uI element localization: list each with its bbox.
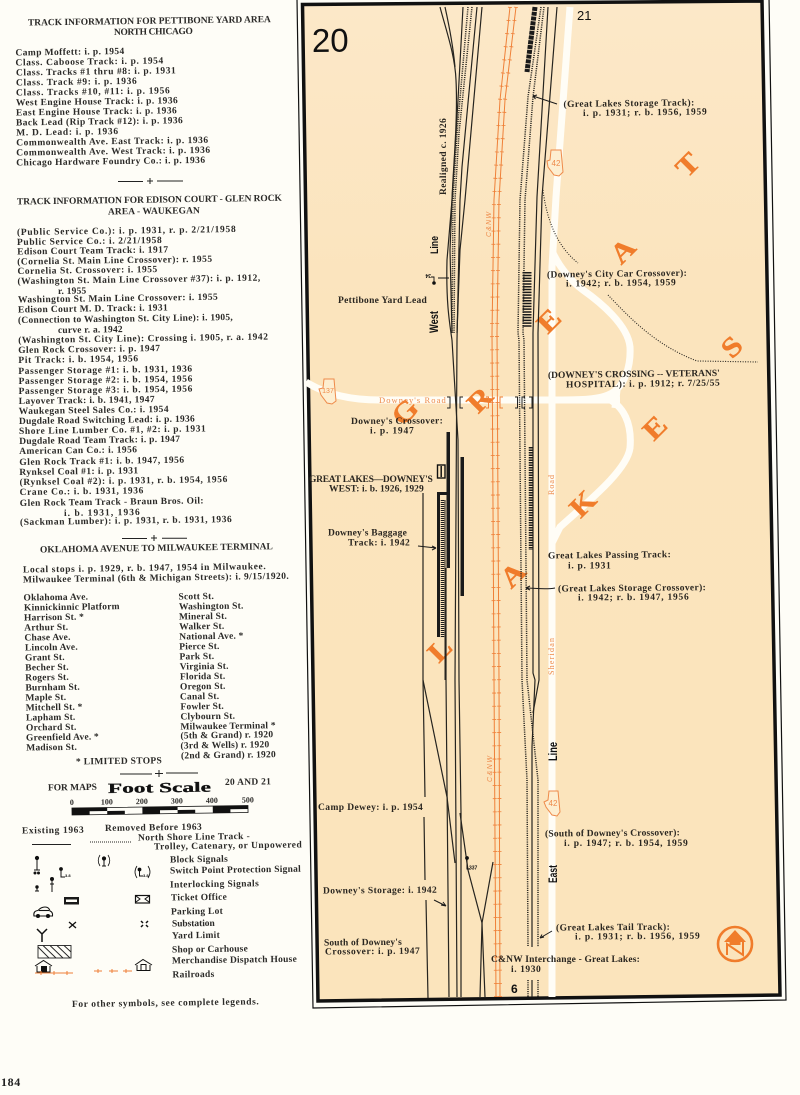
removed dotted city car crossover (543, 190, 758, 362)
text block: Edison Court track list: curve r. a. 1942 (58, 325, 123, 336)
scale bar: 300 (171, 796, 183, 806)
map track labels: i. p. 1947 (370, 426, 414, 436)
text block: stops column one: Kinnickinnic Platform (24, 602, 120, 613)
map track labels (309, 97, 720, 975)
text block: stops column one: Chase Ave. (24, 633, 71, 643)
shield: route 42 south (544, 791, 560, 816)
shield: route 42 north: 42 (552, 159, 561, 168)
text block: Edison Court track list: (Washington St. City Line): Crossing i. 1905, r. a. 1942 (18, 332, 268, 346)
text block: Edison Court track list: Cornelia St. Crossover: i. 1955 (17, 265, 158, 277)
text block: stops column two: Walker St. (179, 622, 224, 632)
panel: legend (22, 823, 303, 1010)
legend column headings: Existing 1963 (22, 826, 84, 836)
panel: Pettibone Yard track information (15, 15, 271, 168)
text block: stops column one (23, 593, 120, 753)
map track labels: i. 1930 (511, 965, 541, 975)
legend labels: Shop or Carhouse (172, 944, 248, 955)
legend column headings (22, 823, 303, 852)
map track labels: (Great Lakes Tail Track): (556, 922, 670, 933)
scale caption (48, 777, 271, 797)
West Line tracks (440, 7, 482, 997)
route shields (319, 150, 563, 816)
orange diagonal lettering: GREAT LAKES: S (714, 329, 749, 364)
icon: merchandise dispatch house and railroads (35, 960, 152, 975)
icon: shop or carhouse hatch (38, 946, 71, 958)
text block: stops column two: Milwaukee Terminal * (180, 721, 276, 732)
map track labels: Downey's Storage: i. 1942 (323, 886, 437, 896)
scale bar: 0 (70, 798, 74, 807)
legend labels: Yard Limit (172, 931, 221, 941)
text block: stops column two: (2nd & Grand) r. 1920 (181, 749, 276, 761)
orange diagonal lettering: GREAT LAKES (385, 146, 749, 669)
map track labels: i. p. 1931 (568, 562, 611, 572)
text block: stops column two: Park St. (179, 652, 214, 662)
map background and frame (297, 0, 786, 1008)
map track labels: (Great Lakes Storage Track): (563, 97, 695, 110)
legend labels: Switch Point Protection Signal (170, 865, 301, 876)
icon: switch point protection signals: 3.8 (65, 873, 71, 878)
text block: stops column two: Washington St. (179, 602, 244, 612)
panel: Edison Court - Glen Rock track information (17, 194, 283, 528)
map track labels: WEST: i. b. 1926, 1929 (329, 484, 424, 494)
text block: Edison Court track list: (Public Service Co.): i. p. 1931, r. p. 2/21/1958 (17, 224, 236, 238)
text block: Edison Court track list: Waukegan Steel Sales Co.: i. 1954 (19, 405, 169, 417)
map track labels: C&NW Interchange - Great Lakes: (491, 955, 640, 965)
street and line labels: Line (429, 236, 441, 254)
legend labels: Block Signals (170, 855, 228, 865)
text block: Edison Court track list: r. 1955 (58, 287, 87, 297)
text block: Pettibone track list: East Engine House Track: i. p. 1936 (16, 106, 177, 118)
text block: Pettibone track list: Class. Tracks #1 thru #8: i. p. 1931 (16, 66, 176, 78)
text block: Edison Court track list: Passenger Storage #1: i. b. 1931, 1936 (18, 365, 192, 377)
text block: Edison Court track list: Dugdale Road Switching Lead: i. p. 1936 (19, 415, 195, 427)
signals on map: 337 (469, 866, 478, 872)
text block: Edison Court track list: Passenger Storage #2: i. b. 1954, 1956 (19, 375, 193, 387)
text block: stops column two: Oregon St. (180, 682, 226, 692)
map track labels: (DOWNEY'S CROSSING -- VETERANS' (548, 368, 720, 381)
text block: Edison Court track list: i. b. 1931, 1936 (64, 508, 140, 519)
text block: Edison Court track list: American Can Co.: i. 1956 (19, 445, 137, 457)
street and line labels: Line (546, 742, 560, 761)
map title numbers: 6 (511, 982, 518, 996)
text block: stops column one: Harrison St. * (24, 613, 84, 623)
text block: local stops note: Local stops i. p. 1929, r. b. 1947, 1954 in Milwaukee. (23, 562, 266, 575)
text block: Pettibone track list: West Engine House Track: i. p. 1936 (16, 96, 178, 108)
text block: stops column one: Lincoln Ave. (25, 643, 78, 653)
icon: switch point protection signals: 3.8 (143, 873, 149, 878)
map track labels: (Great Lakes Storage Crossover): (558, 582, 706, 594)
map track labels: Downey's Crossover: (351, 417, 443, 427)
street and line labels: West (427, 311, 441, 333)
text block: Pettibone track list: Back Lead (Rip Track #12): i. p. 1936 (16, 115, 183, 128)
map title numbers: 20 (312, 22, 349, 59)
text block: stops column two (178, 592, 276, 761)
icon: switch point protection signals (60, 866, 150, 878)
text block: stops column one: Orchard St. (26, 723, 77, 733)
map track labels: i. p. 1931; r. b. 1956, 1959 (583, 107, 707, 119)
map track labels: Camp Dewey: i. p. 1954 (318, 803, 423, 813)
text block: Edison Court track list: Washington St. Main Line Crossover: i. 1955 (18, 293, 218, 305)
map track labels: i. 1942; r. b. 1947, 1956 (578, 593, 689, 603)
street and line labels: Realigned c. 1926 (439, 118, 449, 195)
map track labels: South of Downey's (324, 938, 402, 948)
heading: Pettibone Yard Area (28, 15, 271, 38)
map track labels: GREAT LAKES—DOWNEY'S (309, 475, 433, 485)
text block: Edison Court track list: Glen Rock Team Track - Braun Bros. Oil: (20, 496, 204, 509)
text block: Edison Court track list: Pit Track: i. b. 1954, 1956 (18, 354, 138, 366)
heading: Edison Court - Glen Rock (17, 194, 283, 217)
text block: stops column one: Madison St. (26, 743, 77, 753)
panel: map 20 (297, 0, 786, 1008)
scale bar: 500 (242, 795, 254, 805)
orange diagonal lettering: GREAT LAKES: E (530, 302, 568, 340)
shield: route 137 (319, 379, 336, 404)
map track labels: i. p. 1931; r. b. 1956, 1959 (575, 932, 700, 942)
icon: yard limit (37, 929, 47, 942)
text block: stops column two: Pierce St. (179, 642, 220, 652)
shield: route 42 south: 42 (549, 799, 558, 808)
orange diagonal lettering: GREAT LAKES: T (669, 146, 707, 184)
text block: stops column two: Fowler St. (180, 702, 224, 712)
text block: Edison Court track list: Layover Track: i. b. 1941, 1947 (19, 395, 155, 407)
legend labels: Parking Lot (171, 907, 224, 917)
street and line labels: East (546, 865, 560, 883)
signals on map (425, 272, 478, 872)
scale caption: FOR MAPS (48, 783, 97, 793)
text block: Pettibone track list: Class. Tracks #10, #11: i. p. 1956 (16, 86, 170, 98)
map track labels: Pettibone Yard Lead (338, 296, 428, 306)
icon: interlocking signals (35, 878, 54, 892)
roads (306, 7, 630, 997)
orange diagonal lettering: GREAT LAKES: G (385, 392, 425, 432)
map track labels: Great Lakes Passing Track: (548, 550, 671, 561)
text block: Edison Court track list: Passenger Storage #3: i. b. 1954, 1956 (19, 385, 193, 397)
heading: Edison Court - Glen Rock: AREA - WAUKEGAN (108, 206, 200, 217)
scale caption: 20 AND 21 (225, 777, 271, 788)
text block: stops column two: Virginia St. (180, 662, 229, 672)
map track labels: Downey's Baggage (328, 528, 407, 538)
text block: local stops note: Milwaukee Terminal (6th & Michigan Streets): i. 9/15/1920. (23, 571, 289, 585)
legend labels: Interlocking Signals (170, 879, 259, 890)
icon: ticket office (64, 896, 150, 904)
text block: Pettibone track list: Class. Caboose Track: i. p. 1954 (15, 56, 164, 68)
text block: stops column two: Canal St. (180, 692, 219, 702)
text block: Edison Court track list (17, 224, 268, 528)
text block: Edison Court track list: (Washington St. Main Line Crossover #37): i. p. 1912, (17, 273, 261, 287)
text block: stops column one: Arthur St. (24, 623, 68, 633)
East Line tracks (518, 7, 557, 997)
shield: route 42 north (547, 150, 563, 176)
Downey's storage and yard tracks (423, 432, 493, 998)
street and line labels: C&NW (487, 755, 494, 782)
text block: Pettibone track list: Commonwealth Ave. East Track: i. p. 1936 (16, 136, 208, 148)
text block: stops column one: Lapham St. (26, 713, 76, 723)
heading: Pettibone Yard Area: NORTH CHICAGO (114, 27, 193, 38)
text block: stops column two: National Ave. * (179, 632, 244, 642)
orange diagonal lettering: GREAT LAKES: K (563, 483, 603, 524)
text block: Edison Court track list: Glen Rock Track #1: i. b. 1947, 1956 (19, 456, 184, 468)
text block: stops column one: Grant St. (25, 653, 65, 663)
text block: stops column two: Florida St. (180, 672, 226, 682)
text block: Pettibone track list: Camp Moffett: i. p. 1954 (15, 47, 125, 58)
note: limited stops: * LIMITED STOPS (76, 756, 162, 767)
legend labels: Merchandise Dispatch House (172, 955, 297, 966)
text block: Pettibone track list: Chicago Hardware Foundry Co.: i. p. 1936 (16, 156, 205, 168)
text block: stops column two: Mineral St. (179, 612, 227, 622)
map track labels: Track: i. 1942 (348, 538, 410, 548)
shield: route 137: 137 (322, 388, 334, 395)
text block: Edison Court track list: (Sackman Lumber): i. p. 1931, r. b. 1931, 1936 (20, 514, 232, 528)
text block: Edison Court track list: Dugdale Road Team Track: i. p. 1947 (19, 435, 180, 447)
panel: Oklahoma Avenue to Milwaukee Terminal (23, 542, 289, 767)
orange diagonal lettering: GREAT LAKES: A (493, 555, 532, 594)
text block: stops column two: (5th & Grand) r. 1920 (180, 729, 273, 741)
text block: stops column two: (3rd & Wells) r. 1920 (180, 739, 269, 751)
text block: Edison Court track list: Crane Co.: i. b. 1931, 1936 (20, 486, 144, 498)
text block: stops column one: Maple St. (25, 693, 66, 703)
legend labels: Railroads (172, 970, 215, 980)
orange diagonal lettering: GREAT LAKES: A (603, 231, 642, 270)
map track labels: HOSPITAL): i. p. 1912; r. 7/25/55 (566, 378, 720, 390)
legend column headings: North Shore Line Track - (138, 832, 250, 843)
page number: 184 (1, 1075, 21, 1089)
C&NW railroad orange tracks (492, 7, 516, 997)
street and line labels: Sheridan (547, 638, 556, 675)
panel: foot scale (48, 777, 271, 815)
orange diagonal lettering: GREAT LAKES: L (421, 631, 459, 669)
icon: substation (69, 921, 148, 928)
note: other symbols: For other symbols, see complete legends. (72, 997, 259, 1010)
map track labels: (South of Downey's Crossover): (545, 827, 680, 839)
text block: Edison Court track list: Public Service Co.: i. 2/21/1958 (17, 236, 162, 248)
text block: stops column one: Oklahoma Ave. (23, 593, 88, 603)
map title numbers (312, 8, 591, 996)
text block: Edison Court track list: Shore Line Lumber Co. #1, #2: i. p. 1931 (19, 424, 206, 437)
street and line labels: Downey's Road (379, 395, 446, 405)
scale caption: Foot Scale (108, 781, 211, 797)
text block: Pettibone track list: Commonwealth Ave. West Track: i. p. 1936 (16, 146, 210, 158)
text block: stops column one: Greenfield Ave. * (26, 732, 99, 743)
street and line labels: Road (547, 475, 556, 495)
legend labels (170, 855, 301, 980)
text block: stops column two: Clybourn St. (180, 712, 235, 722)
map track labels: i. p. 1947; r. b. 1954, 1959 (564, 839, 688, 849)
icon: north compass (718, 927, 752, 961)
legend column headings: Removed Before 1963 (105, 823, 202, 834)
text block: local stops note (23, 562, 289, 585)
orange diagonal lettering: GREAT LAKES: E (636, 409, 674, 447)
map title numbers: 21 (577, 8, 591, 23)
text block: Edison Court track list: Glen Rock Crossover: i. p. 1947 (18, 344, 160, 356)
street and line labels (379, 118, 560, 883)
map track labels: (Downey's City Car Crossover): (547, 268, 687, 280)
map track labels: Crossover: i. p. 1947 (325, 947, 420, 957)
icon: block signals (34, 855, 110, 874)
text block: stops column one: Mitchell St. * (26, 703, 83, 713)
map track labels: i. 1942; r. b. 1954, 1959 (566, 278, 676, 289)
legend labels: Substation (172, 919, 216, 929)
legend labels: Ticket Office (171, 893, 227, 903)
text block: Edison Court track list: Rynksel Coal #1: i. p. 1931 (19, 466, 138, 478)
callout arrows (418, 95, 557, 938)
heading: Oklahoma Avenue to Milwaukee Terminal: OKLAHOMA AVENUE TO MILWAUKEE TERMINAL (40, 542, 273, 555)
text block: Edison Court track list: (Rynksel Coal #2): i. p. 1931, r. b. 1954, 1956 (19, 474, 228, 488)
text block: Edison Court track list: (Connection to Washington St. City Line): i. 1905, (18, 312, 233, 326)
text block: Edison Court track list: (Cornelia St. Main Line Crossover): r. 1955 (17, 254, 212, 267)
text block: Edison Court track list: Edison Court Team Track: i. 1917 (17, 245, 168, 257)
text block: stops column one: Becher St. (25, 663, 69, 673)
text block: Pettibone track list: M. D. Lead: i. p. 1936 (16, 127, 118, 138)
signals on map: 34 (425, 272, 431, 278)
scale bar: 200 (136, 797, 148, 806)
scale bar: 100 (101, 797, 113, 807)
icon: parking lot car (34, 907, 53, 918)
text block: stops column two: Scott St. (178, 592, 214, 602)
text block: stops column one: Rogers St. (25, 673, 69, 683)
text block: Edison Court track list: Edison Court M. D. Track: i. 1931 (18, 303, 168, 315)
scale bar: 400 (206, 796, 218, 805)
orange diagonal lettering: GREAT LAKES: R (460, 380, 500, 419)
heading: Pettibone Yard Area: TRACK INFORMATION FOR PETTIBONE YARD AREA (28, 15, 271, 28)
heading: Edison Court - Glen Rock: TRACK INFORMATION FOR EDISON COURT - GLEN ROCK (17, 194, 283, 207)
text block: Pettibone track list (15, 47, 210, 168)
legend column headings: Trolley, Catenary, or Unpowered (154, 840, 303, 852)
text block: Pettibone track list: Class. Track #9: i. p. 1936 (16, 77, 137, 88)
text block: stops column one: Burnham St. (25, 683, 80, 693)
scale bar (70, 795, 254, 815)
street and line labels: C&NW (486, 211, 493, 237)
Downey's Road crossing brackets (447, 397, 532, 408)
